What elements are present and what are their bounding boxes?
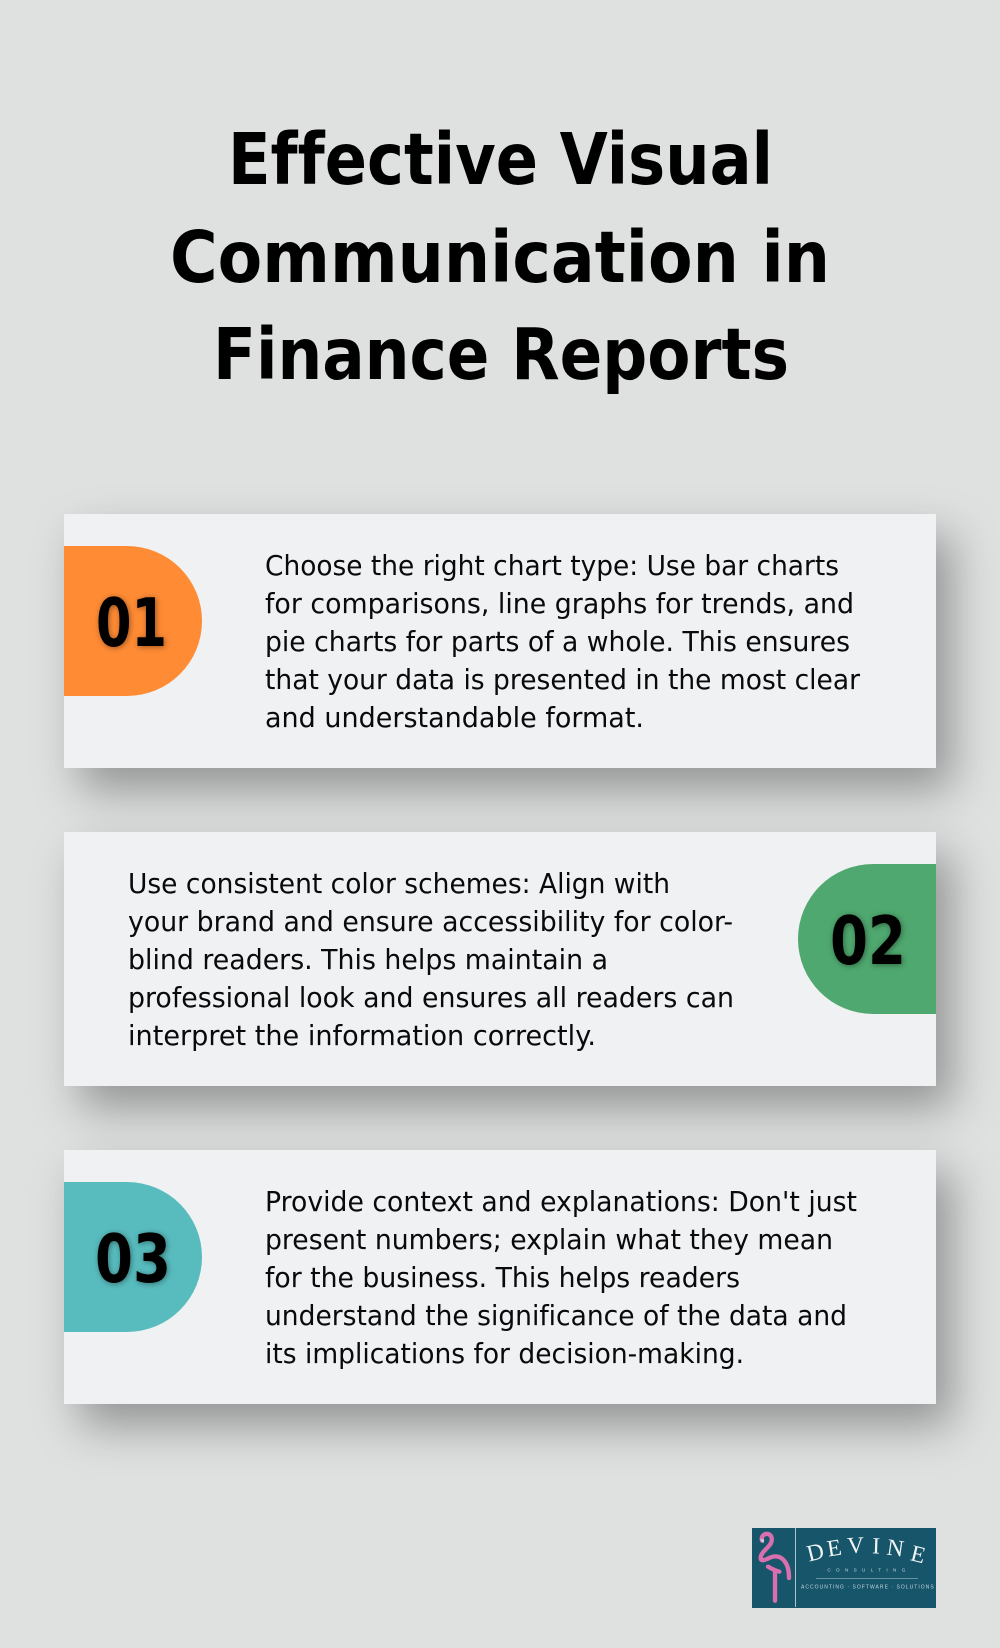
logo wordmark: V	[847, 1532, 865, 1559]
text: choose the right chart type: that your data is presented in the most clear	[265, 664, 861, 696]
text: consistent color schemes	[128, 868, 734, 1052]
text: consistent color schemes: your brand and ensure accessibility for color-	[128, 906, 733, 938]
logo wordmark	[804, 1532, 928, 1569]
text: choose the right chart type: Choose the right chart type: Use bar charts	[265, 550, 839, 582]
text: choose the right chart type	[265, 550, 861, 734]
logo wordmark: D	[804, 1538, 827, 1567]
badge: 02	[798, 864, 936, 1014]
title	[170, 118, 830, 396]
logo wordmark: E	[825, 1535, 843, 1563]
text: context and explanations	[265, 1186, 857, 1370]
panel: step 02	[64, 832, 936, 1086]
icon: flamingo	[761, 1534, 789, 1601]
text: context and explanations: understand the significance of the data and	[265, 1300, 847, 1332]
text: choose the right chart type: pie charts for parts of a whole. This ensures	[265, 626, 850, 658]
logo wordmark: N	[885, 1535, 906, 1563]
text: choose the right chart type: and understandable format.	[265, 702, 644, 734]
logo tagline: ACCOUNTING · SOFTWARE · SOLUTIONS	[801, 1584, 934, 1590]
title: Communication in	[170, 216, 830, 299]
text: context and explanations: present numbers; explain what they mean	[265, 1224, 833, 1256]
logo: Devine Consulting	[752, 1528, 936, 1608]
text: context and explanations: Provide context and explanations: Don't just	[265, 1186, 857, 1218]
logo tagline: CONSULTING	[827, 1567, 906, 1572]
title: Effective Visual	[228, 118, 773, 201]
badge: 01: 01	[96, 584, 167, 662]
panel: step 01	[64, 514, 936, 768]
logo tagline	[801, 1567, 934, 1590]
text: choose the right chart type: for comparisons, line graphs for trends, and	[265, 588, 854, 620]
text: context and explanations: for the business. This helps readers	[265, 1262, 740, 1294]
text: consistent color schemes: interpret the information correctly.	[128, 1020, 596, 1052]
badge: 02: 02	[830, 902, 906, 980]
logo wordmark: E	[908, 1541, 928, 1569]
badge: 03	[64, 1182, 202, 1332]
badge: 03: 03	[95, 1220, 171, 1298]
text: consistent color schemes: Use consistent color schemes: Align with	[128, 868, 670, 900]
logo wordmark: I	[872, 1533, 880, 1560]
text: context and explanations: its implications for decision-making.	[265, 1338, 744, 1370]
text: consistent color schemes: blind readers. This helps maintain a	[128, 944, 608, 976]
badge: 01	[64, 546, 202, 696]
text: consistent color schemes: professional look and ensures all readers can	[128, 982, 734, 1014]
panel: step 03	[64, 1150, 936, 1404]
title: Finance Reports	[213, 313, 789, 396]
